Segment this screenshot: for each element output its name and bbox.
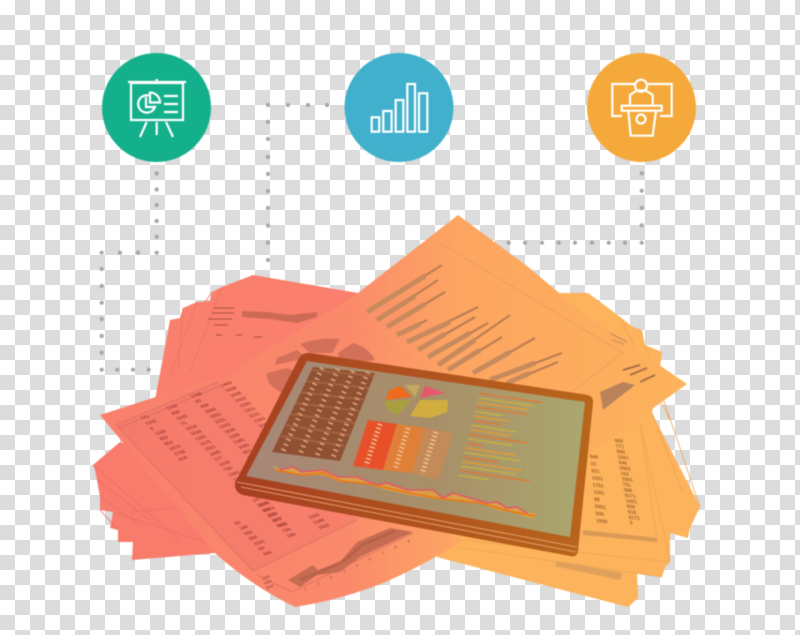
figures columns: 956 xyxy=(248,535,260,542)
figures columns: 1075 xyxy=(265,511,280,519)
figures columns: 69 xyxy=(257,546,267,552)
number table on right sheet xyxy=(590,438,642,527)
figures columns: 1153 xyxy=(218,422,232,430)
figures columns: 1335 xyxy=(238,401,253,409)
document stack: back right sheets xyxy=(437,293,700,607)
spreadsheet on screen xyxy=(272,367,375,461)
number table on right sheet: 5 xyxy=(629,520,633,527)
figures columns: 907 xyxy=(242,449,254,456)
figures columns: 71 xyxy=(180,421,189,427)
number table on right sheet: 0962 xyxy=(619,466,632,473)
figures columns: 9 xyxy=(149,426,156,432)
line chart on screen xyxy=(273,465,535,518)
figures columns: 1168 xyxy=(154,429,168,437)
chart legend: 6000 xyxy=(266,584,274,590)
figures columns: 90 xyxy=(233,520,243,526)
figures columns: 725 xyxy=(281,527,293,534)
figures columns: 1838 xyxy=(223,427,237,435)
figures columns: 1638 xyxy=(229,391,244,399)
figures columns: 775 xyxy=(139,414,151,421)
figures columns: 740 xyxy=(222,466,235,473)
figures columns: 1833 xyxy=(256,501,271,509)
figures columns: 1422 xyxy=(234,396,248,404)
sheet: front table of figures xyxy=(100,377,463,607)
number table on right sheet: 771 xyxy=(615,444,625,450)
number table on right sheet: 8171 xyxy=(624,493,637,500)
figures columns: 1728 xyxy=(173,449,187,457)
chart axis numbers: 123456789 xyxy=(303,533,421,592)
figures columns: 1853 xyxy=(208,412,223,420)
figures columns: 1617 xyxy=(270,516,285,524)
figures columns: 884 xyxy=(262,550,274,557)
connector dots: middle path xyxy=(266,103,329,262)
icon: speaker at podium on orange circle xyxy=(587,53,696,162)
connector dots: right path xyxy=(507,171,644,245)
tablet showing dashboard xyxy=(235,353,593,556)
number table on right sheet: 596 xyxy=(623,487,633,494)
mini area chart xyxy=(242,311,317,323)
figures columns: 235 xyxy=(267,512,279,519)
number table on right sheet: 88 xyxy=(594,497,600,503)
figures columns: 1342 xyxy=(144,419,159,427)
figures columns: 147 xyxy=(251,496,263,503)
icon: presentation board on green circle xyxy=(102,53,211,162)
number table on right sheet: 8171 xyxy=(628,515,641,522)
tablet screen xyxy=(246,361,585,537)
figures columns: 1443 xyxy=(219,381,234,388)
figures columns: 658 xyxy=(246,491,258,498)
figures columns: 1858 xyxy=(232,475,247,483)
figures columns: 1790 xyxy=(165,404,180,411)
figures columns: 1580 xyxy=(237,443,252,451)
number table on right sheet: 909 xyxy=(614,439,624,445)
figures columns: 566 xyxy=(276,522,289,529)
number table on right sheet: 1501 xyxy=(621,476,634,484)
number table on right sheet: 1201 xyxy=(593,490,605,497)
number table on right sheet: 1001 xyxy=(625,498,638,505)
mini chart right xyxy=(600,382,635,410)
figures columns: 1838 xyxy=(189,429,204,437)
figures columns: 63 xyxy=(194,398,204,405)
chart legend: 4000 xyxy=(264,579,272,586)
figures columns: 1521 xyxy=(203,444,218,452)
number table on right sheet: 15 xyxy=(590,461,597,468)
figures columns: 1288 xyxy=(227,432,242,440)
figures columns: 618 xyxy=(177,455,190,462)
figures columns: 1562 xyxy=(257,421,272,429)
figures columns: 906 xyxy=(170,410,182,417)
figures columns: 596 xyxy=(286,532,298,539)
document stack: lower left sheets xyxy=(93,442,250,560)
icon: bar chart on blue circle xyxy=(344,53,454,162)
bar chart on report xyxy=(367,265,562,383)
table area tint xyxy=(116,382,357,571)
chart legend: 2000 xyxy=(262,574,271,581)
number table on right sheet: 1506 xyxy=(596,518,608,525)
figures columns: 1796 xyxy=(189,392,204,399)
number table on right sheet: 846 xyxy=(590,455,598,461)
figures columns: 1541 xyxy=(252,539,267,547)
tablet edge highlights xyxy=(237,482,577,552)
figures columns: 850 xyxy=(256,464,268,471)
figures columns: 751 xyxy=(241,486,254,493)
number table on right sheet: 906 xyxy=(595,511,604,518)
figures columns: 1638 xyxy=(224,386,239,394)
figures columns: 1006 xyxy=(275,521,290,529)
number table on right sheet: 751 xyxy=(622,482,632,489)
connector dots: left path xyxy=(100,171,159,372)
figures columns: 1047 xyxy=(261,468,276,476)
pie chart on screen xyxy=(384,385,448,418)
figures columns: 1388 xyxy=(312,518,327,526)
figures columns: 582 xyxy=(243,530,255,537)
pie chart on paper xyxy=(267,339,375,393)
figures columns: 1668 xyxy=(204,407,218,415)
number table on right sheet: 102 xyxy=(620,471,630,478)
figures columns: 1685 xyxy=(208,450,223,457)
figures columns: 653 xyxy=(163,440,175,447)
number table on right sheet: 921 xyxy=(591,468,600,475)
number table on right sheet: 859 xyxy=(626,504,636,511)
figures columns: 1385 xyxy=(232,438,247,445)
document stack: back left sheets xyxy=(155,275,400,420)
number table on right sheet: 5951 xyxy=(595,504,606,511)
area chart on front sheet xyxy=(288,528,413,587)
figures columns: 1363 xyxy=(262,506,277,514)
figures columns: 1305 xyxy=(307,513,322,520)
figures columns: 386 xyxy=(260,507,273,514)
figures columns: 1231 xyxy=(243,406,258,414)
figures columns: 498 xyxy=(199,403,211,410)
figures columns: 1873 xyxy=(168,444,183,452)
figures columns: 1175 xyxy=(199,439,213,447)
figures columns: 1231 xyxy=(213,417,228,425)
figures columns: 853 xyxy=(158,435,171,442)
tablet body xyxy=(235,353,593,556)
figures columns: 188 xyxy=(238,525,250,532)
figures columns: 1316 xyxy=(184,424,199,432)
number table on right sheet: 946 xyxy=(618,460,628,467)
figures columns: 1035 xyxy=(218,460,232,468)
column blocks on screen xyxy=(353,420,453,480)
figures columns xyxy=(139,381,332,557)
figures columns: 1342 xyxy=(175,414,190,422)
figures columns: 1281 xyxy=(194,434,209,442)
sheet: large report with bar chart xyxy=(212,215,687,470)
figures columns: 21 xyxy=(246,455,256,461)
figures columns: 377 xyxy=(272,517,284,524)
horizontal bar list on screen xyxy=(458,393,542,481)
number table on right sheet: 955 xyxy=(616,449,626,456)
number table on right sheet: 1061 xyxy=(617,455,630,462)
figures columns: 305 xyxy=(237,481,249,488)
figures columns: 1342 xyxy=(251,458,266,466)
figures columns: 1350 xyxy=(227,470,242,478)
figures columns: 1542 xyxy=(257,501,272,508)
figures columns: 1363 xyxy=(253,416,267,424)
number table on right sheet: 1751 xyxy=(592,483,604,490)
figures columns: 1121 xyxy=(248,411,262,419)
figures columns: 1622 xyxy=(317,523,332,531)
figures columns: 177 xyxy=(213,456,225,463)
number table on right sheet: 1501 xyxy=(592,475,604,483)
number table on right sheet: 918 xyxy=(627,509,637,516)
